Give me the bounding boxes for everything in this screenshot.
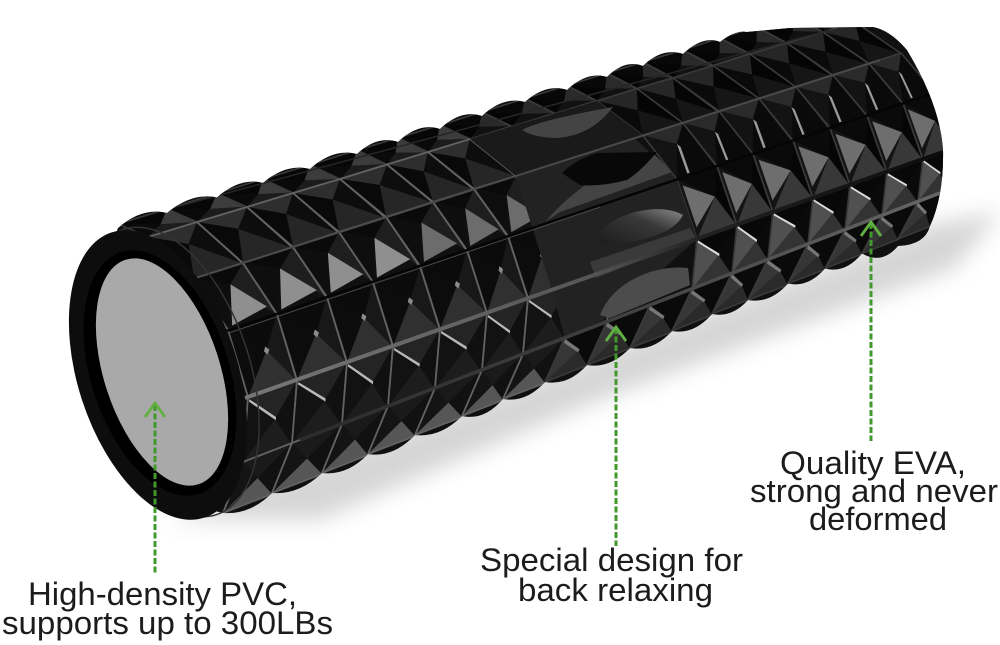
fourth pyramid row — [228, 93, 955, 397]
bottom pyramid row — [223, 189, 950, 513]
label: special design: Special design for — [480, 542, 743, 578]
label: special design — [480, 542, 743, 608]
fifth pyramid row — [243, 148, 955, 462]
label: high-density PVC: supports up to 300LBs — [2, 605, 333, 641]
second pyramid row — [148, 22, 901, 278]
axial grooves — [157, 30, 943, 440]
roller body with pyramid texture — [116, 27, 944, 514]
inner black recess — [55, 231, 265, 515]
label: high-density PVC: High-density PVC, — [28, 576, 297, 612]
label: quality EVA: deformed — [809, 501, 947, 537]
label: special design: back relaxing — [518, 572, 713, 608]
arrow: channel — [606, 327, 626, 546]
foam roller — [68, 27, 944, 520]
label: high-density PVC — [2, 576, 333, 641]
label: quality EVA — [750, 445, 998, 537]
label: quality EVA: strong and never — [750, 473, 998, 509]
label: quality EVA: Quality EVA, — [780, 445, 966, 481]
roller shadow — [170, 212, 1000, 520]
arrow: end disc — [145, 403, 165, 575]
grey end disc — [70, 242, 254, 502]
collar ring — [48, 205, 292, 539]
third pyramid row — [194, 53, 935, 330]
back-relaxing channel — [470, 101, 697, 338]
arrow: body — [861, 222, 881, 441]
top pyramid row — [120, 27, 841, 236]
end cap ring — [36, 208, 280, 542]
